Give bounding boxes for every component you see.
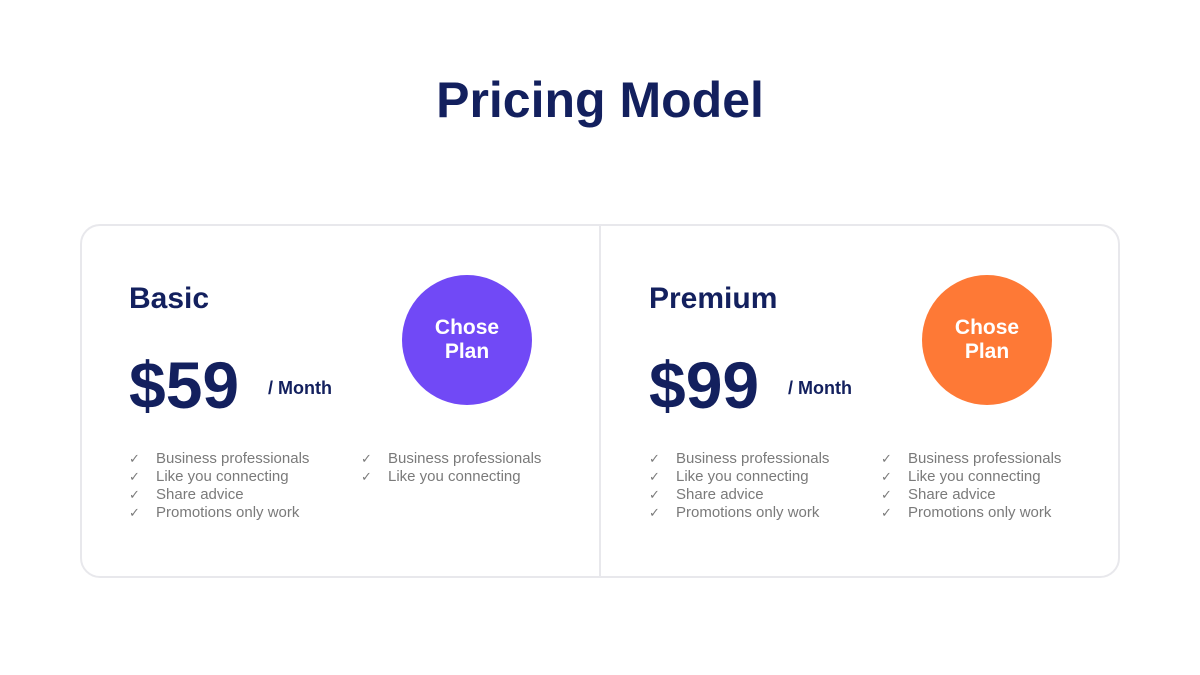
feature list right: Promotions only work [908,504,1051,521]
panel: basic [129,275,541,521]
feature list left: Like you connecting [676,468,809,485]
feature list left: ✓ [129,505,140,520]
feature list right: ✓ [881,469,892,484]
feature list left: Promotions only work [676,504,819,521]
per month: / Month [788,378,852,398]
feature list left: ✓ [649,487,660,502]
heading: Premium: Premium [649,282,777,315]
feature list right: ✓ [361,469,372,484]
feature list left: ✓ [649,451,660,466]
feature list right: ✓ [881,505,892,520]
button: chose plan: Plan [965,340,1009,363]
feature list left: ✓ [129,487,140,502]
feature list left: Like you connecting [156,468,289,485]
feature list right [361,450,541,485]
feature list right: Business professionals [388,450,541,467]
price: $99: $99 [649,348,759,422]
button: chose plan: Chose [955,316,1019,339]
feature list left: ✓ [129,451,140,466]
feature list right [881,450,1061,521]
price: $59: $59 [129,348,239,422]
feature list right: ✓ [361,451,372,466]
feature list left: Business professionals [676,450,829,467]
feature list left [649,450,829,521]
feature list right: Share advice [908,486,996,503]
feature list left: ✓ [649,505,660,520]
button: chose plan: Plan [445,340,489,363]
panel: premium [649,275,1061,521]
feature list right: ✓ [881,487,892,502]
feature list left: Share advice [156,486,244,503]
panel: pricing card [80,224,1120,578]
per month: / Month [268,378,332,398]
feature list right: Like you connecting [388,468,521,485]
feature list left: Share advice [676,486,764,503]
feature list left: ✓ [129,469,140,484]
button: chose plan [402,275,532,405]
feature list left: ✓ [649,469,660,484]
feature list right: ✓ [881,451,892,466]
feature list right: Like you connecting [908,468,1041,485]
feature list left: Promotions only work [156,504,299,521]
heading: Basic: Basic [129,282,209,315]
button: chose plan [922,275,1052,405]
feature list left: Business professionals [156,450,309,467]
feature list right: Business professionals [908,450,1061,467]
feature list left [129,450,309,521]
title: Pricing Model [436,72,764,128]
button: chose plan: Chose [435,316,499,339]
